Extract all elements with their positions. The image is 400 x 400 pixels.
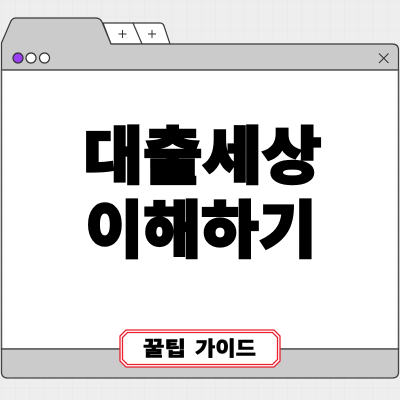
label: tip guide xyxy=(120,330,280,367)
icon: white dot second xyxy=(40,53,50,63)
icon: purple dot xyxy=(13,53,23,63)
window buttons xyxy=(13,53,50,63)
window content panel xyxy=(2,70,398,349)
label text left word: 꿀팁 xyxy=(143,338,186,360)
title xyxy=(84,123,322,266)
icon: white dot xyxy=(26,53,36,63)
icon: close xyxy=(379,54,388,63)
title line 2: 이해하기 xyxy=(86,197,316,266)
inactive tabs xyxy=(103,23,170,44)
window footer bar xyxy=(2,349,398,378)
title line 1: 대출세상 xyxy=(84,123,322,192)
icon: plus second xyxy=(148,30,156,38)
label text right word: 가이드 xyxy=(195,338,256,360)
icon: plus xyxy=(118,30,126,38)
window header bar xyxy=(2,18,398,70)
